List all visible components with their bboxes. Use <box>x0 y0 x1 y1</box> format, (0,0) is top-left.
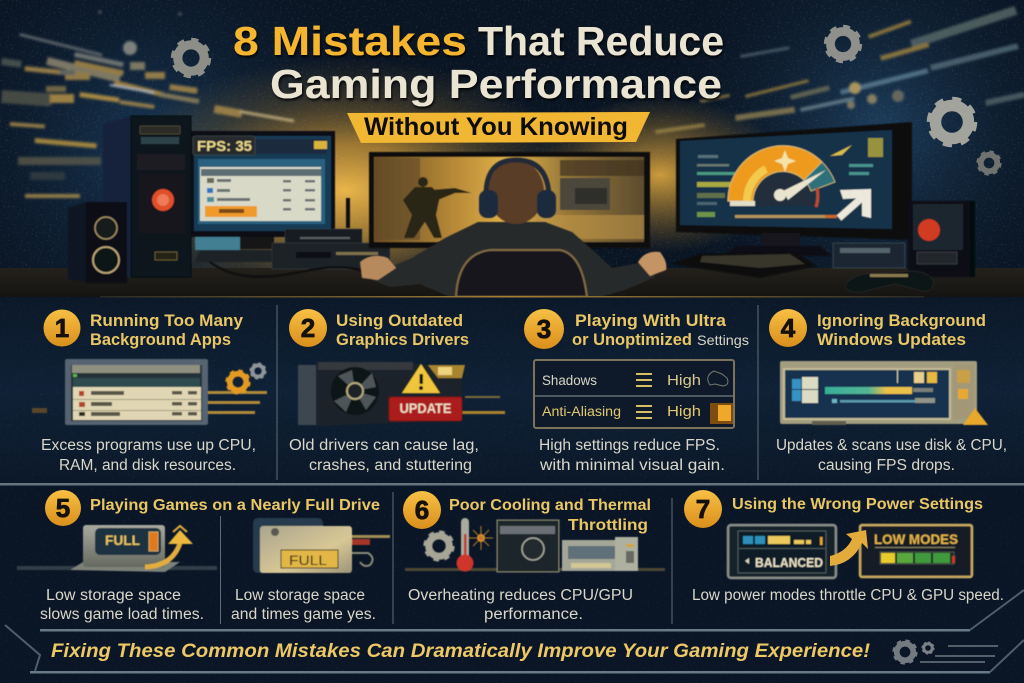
mistake 3 <box>524 309 749 474</box>
setting row: anti-aliasing: Anti-Aliasing <box>542 404 621 419</box>
mistake 4: causing FPS drops. <box>818 457 955 474</box>
heading 5: Playing Games on a Nearly Full Drive <box>90 497 380 514</box>
grid panel <box>868 138 883 157</box>
subtitle banner: Without You Knowing <box>364 113 628 141</box>
footer gears and circuit lines <box>894 641 998 663</box>
left computer setup <box>68 116 390 283</box>
number badge 1: 1 <box>55 313 69 343</box>
icon: windows update window <box>780 361 988 425</box>
icon: right tower <box>908 201 975 277</box>
soldier <box>403 177 472 238</box>
icon: cooler card <box>497 520 559 572</box>
description 2: Old drivers can cause lag, <box>289 437 479 454</box>
mistake 4: Windows Updates <box>817 330 966 349</box>
update button: UPDATE <box>400 401 452 416</box>
update button <box>389 397 462 421</box>
icon: gear top right <box>826 27 860 61</box>
icon: left monitor <box>191 131 350 262</box>
mistake 6: Throttling <box>568 517 648 534</box>
icon: overheating components <box>405 518 665 572</box>
icon: second full drive <box>253 518 390 573</box>
footer message: Fixing These Common Mistakes Can Dramatically Improve Your Gaming Experience! <box>51 641 870 662</box>
mistake 5 <box>17 490 390 623</box>
description 3: High settings reduce FPS. <box>539 437 720 454</box>
number badge 6: 6 <box>415 495 429 525</box>
mistake 3: or Unoptimized <box>572 330 692 349</box>
desk <box>0 268 1024 297</box>
setting row: shadows <box>542 371 728 389</box>
icon: full drive with arrow <box>17 525 217 572</box>
heading 2: Using Outdated <box>336 311 463 330</box>
keyboard <box>672 252 817 278</box>
windows logo <box>792 377 818 403</box>
heading 3: Playing With Ultra <box>575 311 727 330</box>
number badge 1 <box>44 310 80 346</box>
icon: full drive with arrow: FULL <box>105 533 140 548</box>
full label: FULL <box>289 553 328 568</box>
right monitor <box>676 122 912 256</box>
icon: balanced power box: BALANCED <box>755 555 823 570</box>
gold edge of desk <box>100 296 924 298</box>
head <box>488 160 544 224</box>
heading 6: Poor Cooling and Thermal <box>449 497 651 514</box>
mistake 2: Graphics Drivers <box>336 330 469 349</box>
icon: gear left <box>173 40 209 76</box>
mistake 1: RAM, and disk resources. <box>59 457 236 474</box>
icon: app window with gears <box>32 359 267 425</box>
speckle texture row one and two <box>0 297 1024 683</box>
mistake 4 <box>769 309 1007 474</box>
heading 4: Ignoring Background <box>817 311 986 330</box>
icon: speaker <box>68 202 127 283</box>
left data bars <box>697 155 837 218</box>
heading 1: Running Too Many <box>90 311 244 330</box>
icon: low modes box <box>860 525 972 577</box>
left hand <box>360 256 396 280</box>
number badge 4: 4 <box>781 313 796 343</box>
icon: balanced power box <box>728 525 836 578</box>
icon: router and console boxes <box>272 229 390 269</box>
setting row: shadows: High <box>667 372 701 389</box>
hero scene background <box>0 0 1024 297</box>
title: That Reduce <box>478 18 724 64</box>
right side tower and gamepad <box>833 201 975 293</box>
headphones <box>486 160 549 195</box>
speed streaks left <box>1 10 294 198</box>
mistake 6: performance. <box>484 606 583 623</box>
number badge 7: 7 <box>696 494 710 524</box>
setting row: anti-aliasing <box>542 403 733 424</box>
number badge 6 <box>403 491 441 529</box>
description 5 right: Low storage space <box>235 587 365 604</box>
title: Gaming Performance <box>270 61 722 107</box>
speedometer gauge <box>728 145 852 207</box>
arrow up right <box>839 196 864 218</box>
icon: gear right large <box>929 99 975 145</box>
speed streaks right <box>655 6 1024 134</box>
number badge 3 <box>524 309 564 349</box>
mistake 2: crashes, and stuttering <box>309 457 472 474</box>
description 6: Overheating reduces CPU/GPU <box>408 587 633 604</box>
panel: row one <box>0 297 1024 484</box>
number badge 5 <box>45 490 81 526</box>
title: 8 Mistakes <box>233 18 467 64</box>
description 7: Low power modes throttle CPU & GPU speed. <box>692 587 1004 604</box>
number badge 2: 2 <box>301 313 315 343</box>
section dividers <box>0 305 1024 674</box>
right hand <box>638 252 666 276</box>
person at desk <box>360 160 666 297</box>
icon: low modes box: LOW MODES <box>874 531 958 547</box>
description 1: Excess programs use up CPU, <box>41 437 256 454</box>
mistake 6 <box>403 491 665 623</box>
FPS counter: FPS: 35 <box>197 138 252 155</box>
number badge 5: 5 <box>56 493 70 523</box>
mistake 7 <box>684 490 1004 604</box>
settings panel <box>534 360 734 428</box>
mistake 2 <box>289 309 505 474</box>
number badge 3: 3 <box>537 314 551 344</box>
icon: PC tower <box>103 116 191 278</box>
mistake 5: and times game yes. <box>231 606 376 623</box>
gears top <box>173 27 1000 174</box>
chair <box>456 250 587 297</box>
setting row: shadows: Shadows <box>542 373 597 388</box>
icon: graphics card with update warning <box>298 362 505 426</box>
task manager window <box>198 159 325 224</box>
heading 7: Using the Wrong Power Settings <box>732 496 983 513</box>
mistake 1 <box>32 310 267 474</box>
number badge 2 <box>289 309 327 347</box>
mistake 3: Settings <box>697 332 749 348</box>
hoodie <box>372 222 655 297</box>
description 4: Updates & scans use disk & CPU, <box>776 437 1007 454</box>
title <box>233 18 724 107</box>
arrow balanced to low modes <box>830 530 868 566</box>
setting row: anti-aliasing: High <box>667 403 701 420</box>
number badge 7 <box>684 490 722 528</box>
description 5 left: Low storage space <box>46 587 181 604</box>
icon: gear right small <box>978 152 1000 174</box>
box <box>833 243 905 268</box>
icon: gamepad <box>845 271 934 293</box>
number badge 4 <box>769 309 807 347</box>
icon: desktop unit <box>562 537 638 571</box>
center monitor <box>369 152 650 248</box>
mistake 5: slows game load times. <box>40 606 204 623</box>
mistake 3: with minimal visual gain. <box>539 457 725 474</box>
mistake 1: Background Apps <box>90 330 231 349</box>
